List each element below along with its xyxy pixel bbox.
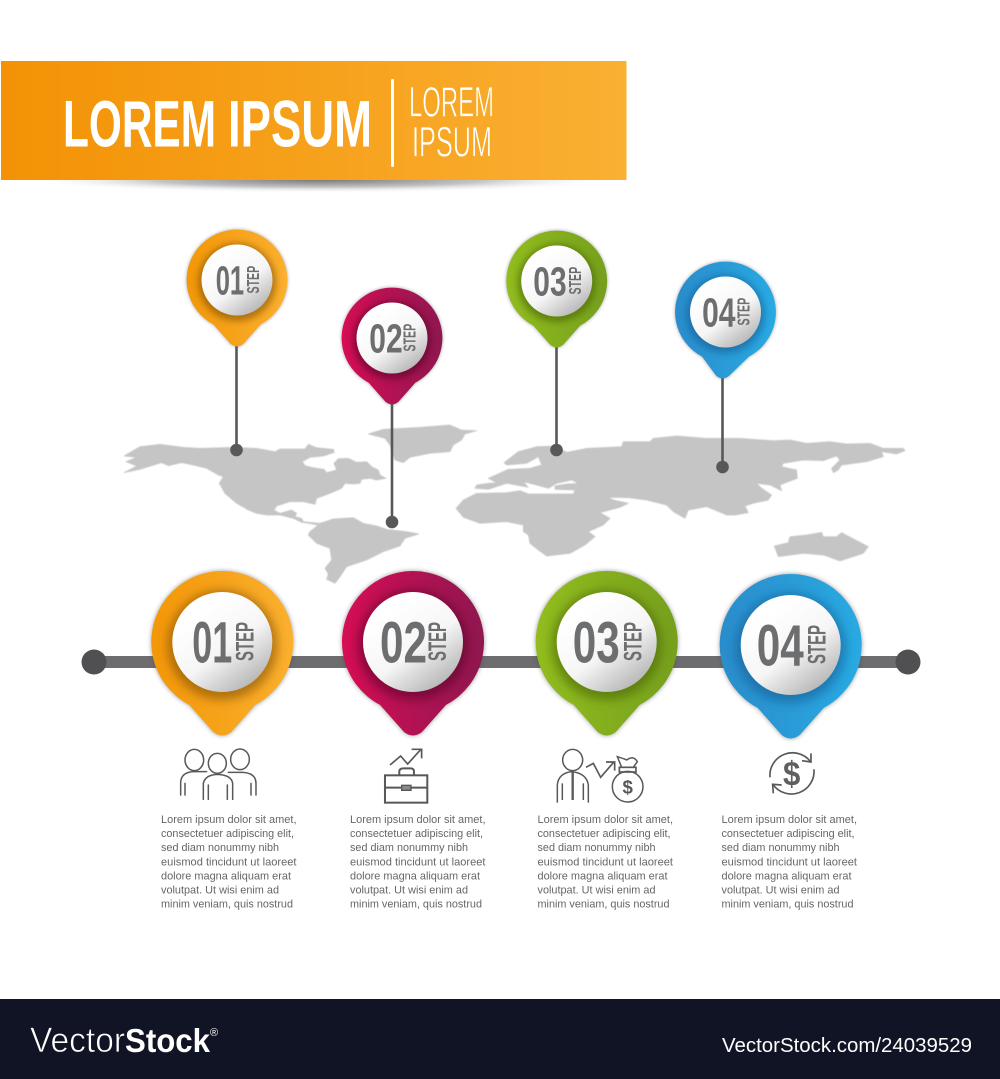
text block 2: consectetuer adipiscing elit, bbox=[350, 828, 483, 840]
pin 4 stem bbox=[716, 370, 729, 473]
text block 4: volutpat. Ut wisi enim ad bbox=[722, 884, 840, 896]
text block 1: consectetuer adipiscing elit, bbox=[161, 828, 294, 840]
banner bar bbox=[1, 61, 626, 180]
text block 4 bbox=[722, 814, 857, 911]
icon: businessman and money bag bbox=[557, 749, 643, 803]
text block 1: euismod tincidunt ut laoreet bbox=[161, 856, 296, 868]
text block 2 bbox=[350, 814, 486, 911]
text block 4: sed diam nonummy nibh bbox=[722, 842, 840, 854]
pin 2 head bbox=[342, 288, 442, 404]
footer logo: ® bbox=[210, 1027, 218, 1039]
large pin 4 bbox=[720, 574, 862, 738]
greenland bbox=[368, 425, 477, 463]
timeline bbox=[82, 650, 920, 674]
text block 2: euismod tincidunt ut laoreet bbox=[350, 856, 486, 868]
text block 3: consectetuer adipiscing elit, bbox=[538, 828, 670, 840]
large pin 4: STEP bbox=[804, 625, 832, 664]
text block 4: euismod tincidunt ut laoreet bbox=[722, 856, 857, 868]
text block 3 bbox=[538, 814, 673, 911]
large pin 1: 01 bbox=[192, 610, 232, 676]
pin 4 head bbox=[675, 262, 776, 378]
large pin 2 bbox=[342, 571, 484, 736]
text block 1: minim veniam, quis nostrud bbox=[161, 899, 293, 911]
large pin 3: STEP bbox=[620, 622, 648, 661]
text block 4: minim veniam, quis nostrud bbox=[722, 899, 854, 911]
footer bar bbox=[0, 999, 1000, 1079]
banner subtitle: IPSUM bbox=[412, 118, 492, 166]
banner subtitle: LOREM bbox=[409, 78, 494, 126]
pin 1 stem bbox=[230, 335, 243, 456]
map pin 4 bbox=[675, 262, 776, 473]
text block 3: sed diam nonummy nibh bbox=[538, 842, 656, 854]
icon: team of people bbox=[181, 749, 256, 799]
large pin 3: 03 bbox=[573, 610, 620, 676]
text block 4: dolore magna aliquam erat bbox=[722, 870, 852, 882]
pin 2 head: STEP bbox=[399, 324, 419, 351]
world map bbox=[124, 425, 905, 583]
text block 2: sed diam nonummy nibh bbox=[350, 842, 468, 854]
text block 1: Lorem ipsum dolor sit amet, bbox=[161, 814, 296, 826]
text block 2: dolore magna aliquam erat bbox=[350, 870, 480, 882]
map pin 2 bbox=[342, 288, 442, 528]
map pin 3 bbox=[506, 231, 607, 456]
icon: dollar cycle bbox=[770, 753, 814, 794]
footer id: VectorStock.com/24039529 bbox=[722, 1035, 972, 1057]
text block 2: volutpat. Ut wisi enim ad bbox=[350, 884, 468, 896]
banner title: IPSUM bbox=[228, 86, 372, 160]
large pin 1 bbox=[151, 571, 293, 736]
pin 3 head: STEP bbox=[565, 267, 585, 294]
banner divider bbox=[391, 79, 394, 167]
map pin 1 bbox=[187, 230, 287, 456]
australia bbox=[774, 532, 868, 561]
banner bbox=[1, 61, 626, 193]
text block 4: Lorem ipsum dolor sit amet, bbox=[722, 814, 857, 826]
text block 1: dolore magna aliquam erat bbox=[161, 870, 291, 882]
pin 4 head: 04 bbox=[702, 290, 736, 336]
footer logo: VectorStock bbox=[30, 1021, 215, 1060]
text block 4: consectetuer adipiscing elit, bbox=[722, 828, 854, 840]
large pin 2: 02 bbox=[380, 610, 427, 676]
banner shadow bbox=[25, 167, 615, 193]
pin 1 head: STEP bbox=[243, 266, 263, 293]
footer bbox=[0, 999, 1000, 1079]
pin 1 head: 01 bbox=[216, 258, 244, 304]
text block 3: minim veniam, quis nostrud bbox=[538, 899, 670, 911]
pin 3 head: 03 bbox=[533, 259, 567, 305]
eurasia and africa bbox=[456, 436, 905, 556]
americas bbox=[124, 444, 419, 583]
text block 3: euismod tincidunt ut laoreet bbox=[538, 856, 673, 868]
pin 3 head bbox=[506, 231, 607, 347]
text block 3: volutpat. Ut wisi enim ad bbox=[538, 884, 656, 896]
text block 1: volutpat. Ut wisi enim ad bbox=[161, 884, 279, 896]
pin 4 head: STEP bbox=[734, 298, 754, 325]
large pin 2: STEP bbox=[424, 622, 452, 661]
text block 3: Lorem ipsum dolor sit amet, bbox=[538, 814, 673, 826]
pin 1 head bbox=[187, 230, 287, 346]
icon: briefcase with growth arrow bbox=[385, 749, 427, 803]
banner subtitle bbox=[409, 78, 494, 166]
icon: dollar cycle: $ bbox=[783, 755, 800, 793]
large pin 3 bbox=[536, 571, 678, 736]
large pin 1: STEP bbox=[231, 622, 259, 661]
pin 2 head: 02 bbox=[369, 316, 403, 362]
banner title: LOREM bbox=[63, 86, 216, 160]
text block 2: minim veniam, quis nostrud bbox=[350, 899, 482, 911]
pin 3 stem bbox=[550, 340, 563, 456]
pin 2 stem bbox=[386, 395, 398, 528]
text block 2: Lorem ipsum dolor sit amet, bbox=[350, 814, 486, 826]
text block 1 bbox=[161, 814, 296, 911]
text block 3: dolore magna aliquam erat bbox=[538, 870, 668, 882]
icon: businessman and money bag: $ bbox=[622, 776, 633, 797]
large pin 4: 04 bbox=[757, 614, 804, 678]
text block 1: sed diam nonummy nibh bbox=[161, 842, 279, 854]
